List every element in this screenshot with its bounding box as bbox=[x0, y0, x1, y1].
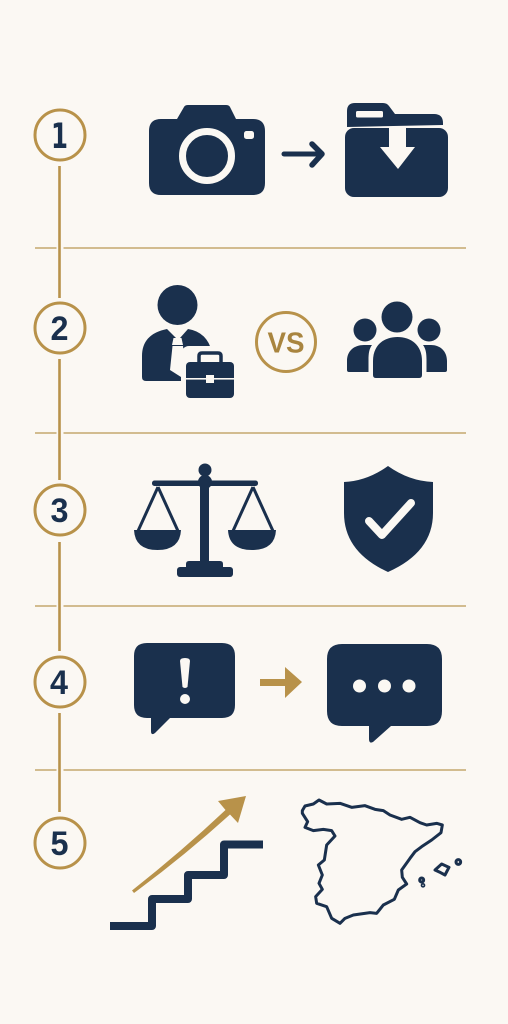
icon: shield with check bbox=[344, 466, 433, 572]
icon: businessperson with briefcase bbox=[142, 285, 234, 398]
VS badge: VS bbox=[268, 328, 304, 360]
step 4 badge: 4 bbox=[50, 664, 68, 702]
step 5 badge bbox=[35, 818, 85, 868]
icon: download folder bbox=[345, 103, 448, 197]
VS badge bbox=[256, 312, 316, 372]
icon: camera bbox=[149, 105, 265, 195]
map: Spain outline bbox=[302, 800, 461, 923]
step 1 badge: 1 bbox=[51, 117, 68, 157]
step 2 badge bbox=[35, 303, 85, 353]
step 1 badge bbox=[35, 110, 85, 160]
arrow: gold arrow to reply bbox=[260, 667, 302, 698]
icon: balance scale bbox=[134, 464, 276, 577]
arrow: rising gold arrow bbox=[132, 796, 246, 893]
step 4 badge bbox=[35, 657, 85, 707]
icon: speech bubble with dots bbox=[327, 644, 442, 743]
step 5 badge: 5 bbox=[50, 825, 68, 863]
icon: speech bubble with exclamation bbox=[134, 643, 235, 734]
step 3 badge bbox=[35, 485, 85, 535]
step 2 badge: 2 bbox=[50, 310, 68, 348]
arrow: camera to folder bbox=[284, 144, 322, 165]
step 3 badge: 3 bbox=[50, 492, 68, 530]
icon: group of people bbox=[347, 302, 447, 378]
icon: stairs bbox=[110, 844, 263, 926]
